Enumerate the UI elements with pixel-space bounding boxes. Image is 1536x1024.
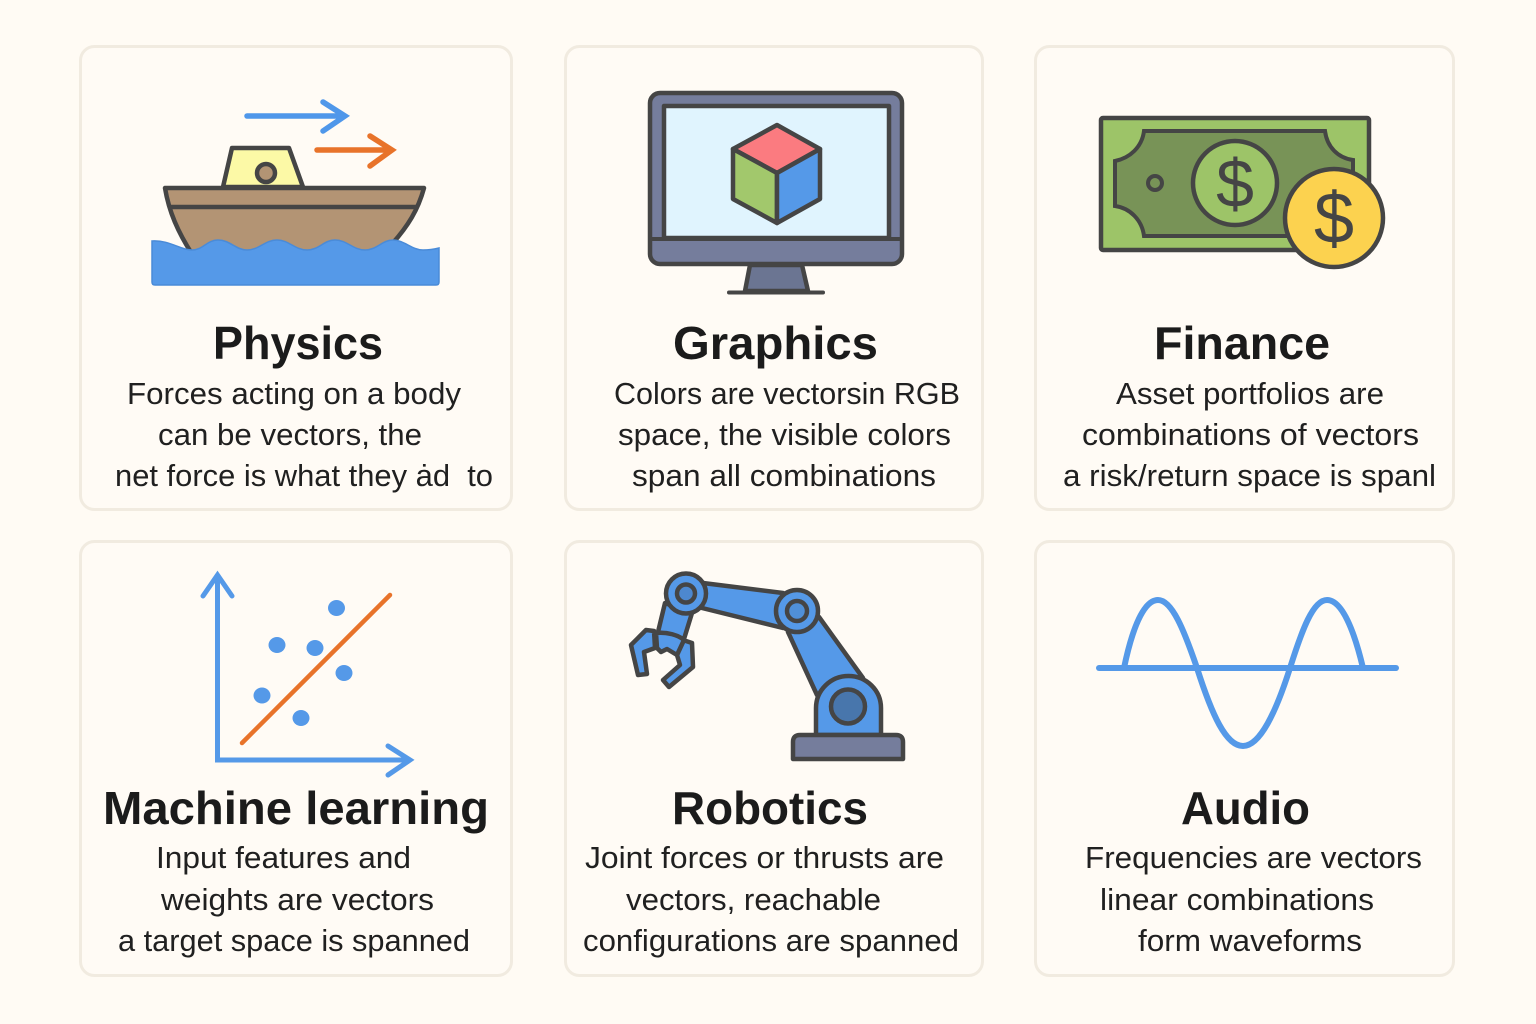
arrow: blue force [247, 102, 345, 131]
hull stripe [171, 205, 418, 209]
monitor chin line [650, 237, 902, 241]
monitor body [650, 93, 902, 264]
panel: graphics [566, 46, 982, 510]
panel: physics [80, 46, 512, 510]
heading: finance: Finance [1154, 317, 1330, 369]
heading: graphics: Graphics [673, 317, 878, 369]
text: graphics description: Colors are vectorsin RGB [614, 376, 960, 411]
panel: robotics [566, 542, 982, 976]
gripper palm [656, 633, 684, 655]
boat cabin [223, 148, 303, 187]
dollar sign on note: $ [1216, 146, 1254, 222]
banknote inner panel [1115, 131, 1353, 236]
gripper left finger [631, 630, 655, 675]
heading: machine learning: Machine learning [103, 782, 489, 834]
text: robotics description: configurations are spanned [583, 923, 959, 958]
text: audio description [1085, 840, 1422, 958]
text: finance description: a risk/return space is spanl [1063, 458, 1436, 493]
shoulder joint [666, 574, 706, 614]
text: machine learning description [118, 840, 470, 958]
dollar sign on coin: $ [1314, 179, 1354, 259]
heading: robotics: Robotics [672, 782, 868, 834]
elbow joint [776, 590, 818, 632]
monitor stand [745, 265, 808, 291]
text: machine learning description: Input features and [156, 840, 411, 875]
monitor screen [664, 106, 889, 238]
text: robotics description [583, 840, 959, 958]
cube [733, 125, 820, 223]
upper arm [702, 583, 783, 628]
text: audio description: linear combinations [1100, 882, 1374, 917]
text: audio description: Frequencies are vectors [1085, 840, 1422, 875]
text: audio description: form waveforms [1138, 923, 1362, 958]
text: machine learning description: a target space is spanned [118, 923, 470, 958]
text: graphics description: span all combinations [632, 458, 936, 493]
housing hub [831, 690, 865, 724]
base plate [793, 735, 903, 759]
text: machine learning description: weights are vectors [160, 882, 434, 917]
text: physics description [115, 376, 493, 493]
panel: machine learning [80, 542, 512, 976]
monitor base [729, 290, 823, 294]
regression line [242, 595, 390, 743]
gripper right finger [663, 640, 693, 687]
icon: boat with force arrows [152, 102, 439, 285]
icon: sound wave [1099, 600, 1396, 746]
banknote [1101, 118, 1369, 250]
forearm [658, 603, 692, 639]
panel: finance [1036, 46, 1454, 510]
boat hull [165, 188, 424, 262]
boat porthole [257, 164, 275, 182]
water waves [152, 240, 439, 285]
text: physics description: can be vectors, the [158, 417, 422, 452]
heading: physics: Physics [213, 317, 383, 369]
panel: audio [1036, 542, 1454, 976]
text: finance description: Asset portfolios are [1116, 376, 1384, 411]
arm housing [816, 676, 881, 735]
text: finance description: combinations of vectors [1082, 417, 1419, 452]
text: physics description: Forces acting on a body [127, 376, 462, 411]
arrow: orange force [317, 136, 392, 166]
banknote punch hole [1148, 176, 1162, 190]
coin [1285, 169, 1383, 267]
icon: monitor with RGB cube [650, 93, 902, 292]
lower arm [788, 617, 863, 695]
heading: audio: Audio [1181, 782, 1310, 834]
icon: robot arm [631, 574, 903, 759]
text: robotics description: vectors, reachable [626, 882, 881, 917]
text: graphics description [614, 376, 960, 493]
icon: banknote and coin [1101, 118, 1383, 267]
text: robotics description: Joint forces or thrusts are [585, 840, 944, 875]
icon: scatter plot with regression line [203, 575, 410, 775]
banknote medallion [1193, 141, 1277, 225]
waveform [1124, 600, 1363, 746]
text: finance description [1063, 376, 1436, 493]
data points [254, 600, 352, 726]
wave baseline [1099, 665, 1396, 671]
text: physics description: net force is what they ȧd to [115, 458, 493, 493]
chart axes [203, 575, 410, 775]
text: graphics description: space, the visible colors [618, 417, 951, 452]
